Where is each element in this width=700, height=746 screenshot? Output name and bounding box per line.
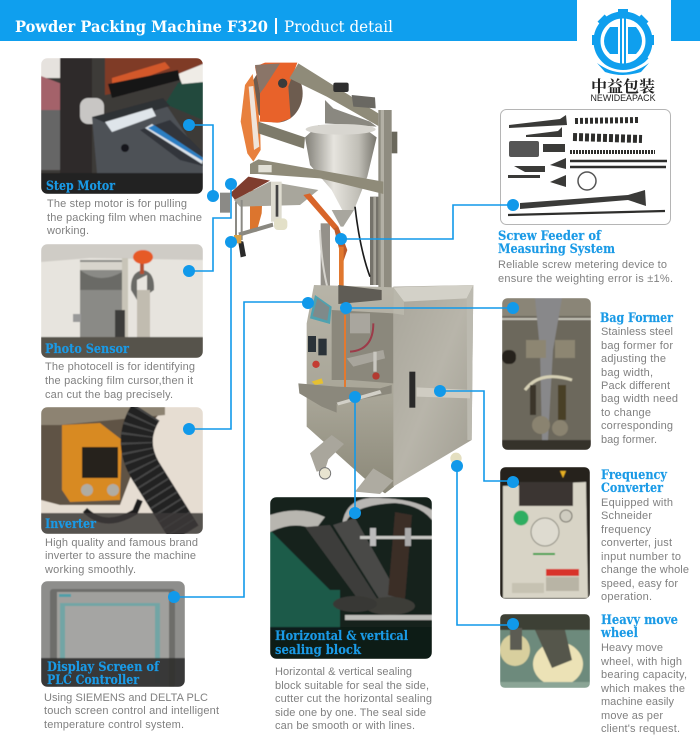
heading: display screen xyxy=(47,660,160,688)
text: bag former xyxy=(601,326,678,446)
connector: bag former xyxy=(340,302,519,314)
header bar xyxy=(0,0,700,41)
text: screw feeder xyxy=(498,259,673,285)
text: step motor: The step motor is for pulling xyxy=(47,198,187,210)
panel: display screen xyxy=(41,581,219,731)
heading: frequency converter: Converter xyxy=(601,481,663,496)
text: bag former: bag width, xyxy=(601,367,653,379)
text: step motor xyxy=(46,198,202,237)
side guides xyxy=(234,182,287,257)
text: photo sensor: the packing film cursor,then it xyxy=(45,375,193,387)
text: sealing block: cutter cut the horizontal sealing xyxy=(275,693,432,705)
panel: heavy move wheel xyxy=(500,613,687,735)
text: inverter: working smoothly. xyxy=(44,564,136,576)
text: heavy move wheel: machine easily xyxy=(601,696,674,708)
film roll xyxy=(241,63,303,232)
photo: PLC display xyxy=(41,581,185,687)
text: frequency converter: Schneider xyxy=(601,510,652,522)
machine frame xyxy=(258,63,397,307)
text: frequency converter: frequency xyxy=(601,524,652,536)
text: bag former: corresponding xyxy=(601,420,673,432)
connector: heavy move wheel xyxy=(451,460,519,630)
panel: bag former xyxy=(502,298,678,450)
photo: screw parts xyxy=(500,110,670,224)
connector: frequency converter xyxy=(434,385,519,488)
panel: frequency converter xyxy=(500,467,689,603)
photo: wheel xyxy=(500,614,590,688)
panel: inverter xyxy=(41,407,203,576)
text: bag former: bag former. xyxy=(601,434,657,446)
text: frequency converter: change the whole xyxy=(601,564,689,576)
heading: sealing block: sealing block xyxy=(275,643,362,658)
upper cross bar xyxy=(220,159,383,213)
photo: bag former xyxy=(502,298,591,450)
hopper xyxy=(305,83,377,227)
text: inverter: High quality and famous brand xyxy=(45,537,198,549)
text: display screen: Using SIEMENS and DELTA PLC xyxy=(44,692,208,704)
connector: photo sensor xyxy=(183,178,237,277)
text: step motor: working. xyxy=(46,225,89,237)
title: Product detail xyxy=(284,17,393,36)
text: frequency converter: input number to xyxy=(601,551,681,563)
heading: heavy move wheel: wheel xyxy=(600,626,638,641)
text: heavy move wheel: Heavy move xyxy=(601,642,663,654)
text: screw feeder: ensure the weighting error is ±1%. xyxy=(498,273,673,285)
text: frequency converter: converter, just xyxy=(601,537,672,549)
heading: heavy move wheel xyxy=(600,613,678,641)
text: step motor: the packing film when machine xyxy=(47,212,202,224)
text: frequency converter: operation. xyxy=(601,591,652,603)
photo: step motor xyxy=(41,58,203,194)
text: bag former: bag former for xyxy=(601,340,673,352)
connector: sealing block xyxy=(349,391,361,519)
text: frequency converter: speed, easy for xyxy=(601,578,678,590)
text: bag former: Stainless steel xyxy=(601,326,673,338)
text: sealing block: Horizontal & vertical sealing xyxy=(275,666,412,678)
heading: display screen: Display Screen of xyxy=(47,660,160,675)
connector: inverter xyxy=(183,236,237,435)
text: bag former: to change xyxy=(601,407,651,419)
text: heavy move wheel: wheel, with high xyxy=(600,656,682,668)
panel: step motor xyxy=(41,58,203,237)
heading: screw feeder: Measuring System xyxy=(498,242,615,257)
text: heavy move wheel: client's request. xyxy=(601,723,680,735)
panel: sealing block xyxy=(270,497,432,732)
text: display screen: touch screen control and intelligent xyxy=(44,705,219,717)
text: display screen: temperature control system. xyxy=(44,719,184,731)
panel: photo sensor xyxy=(41,244,203,401)
title: Powder Packing Machine F320 xyxy=(15,17,268,36)
text: inverter xyxy=(44,537,198,576)
heading: frequency converter: Frequency xyxy=(601,468,667,483)
heading: screw feeder: Screw Feeder of xyxy=(498,229,602,244)
text: bag former: Pack different xyxy=(601,380,670,392)
control panel xyxy=(308,285,382,385)
text: frequency converter: Equipped with xyxy=(601,497,673,509)
film strip xyxy=(303,193,370,390)
text: bag former: adjusting the xyxy=(601,353,666,365)
photo: sealing block xyxy=(270,497,432,659)
connector: step motor xyxy=(183,119,219,202)
heading: photo sensor: Photo Sensor xyxy=(45,342,129,357)
logo xyxy=(590,9,656,103)
text: display screen xyxy=(44,692,219,731)
text: photo sensor: can cut the bag precisely. xyxy=(45,389,173,401)
sealing mechanism xyxy=(298,310,393,413)
text: heavy move wheel xyxy=(600,642,687,735)
heading: sealing block: Horizontal & vertical xyxy=(275,629,408,644)
heading: bag former: Bag Former xyxy=(600,311,673,326)
machine base xyxy=(307,285,394,493)
text: heavy move wheel: which makes the xyxy=(600,683,685,695)
connector: screw feeder xyxy=(335,199,519,245)
text: bag former: bag width need xyxy=(601,393,678,405)
heading: step motor: Step Motor xyxy=(46,179,115,194)
logo: 中益包装 xyxy=(591,74,655,97)
heading: frequency converter xyxy=(601,468,667,496)
connector: display screen xyxy=(168,297,314,603)
photo: frequency converter xyxy=(500,467,590,599)
text: heavy move wheel: move as per xyxy=(601,710,663,722)
text: inverter: inverter to assure the machine xyxy=(45,550,196,562)
logo: NEWIDEAPACK xyxy=(590,93,656,103)
heading: inverter: Inverter xyxy=(45,517,96,532)
text: sealing block: side one by one. The seal side xyxy=(275,707,426,719)
text: heavy move wheel: bearing capacity, xyxy=(601,669,687,681)
heading: sealing block xyxy=(275,629,408,658)
machine photo xyxy=(220,63,473,494)
panel: screw feeder xyxy=(498,110,673,285)
text: frequency converter xyxy=(601,497,689,603)
text: sealing block: block suitable for seal the side, xyxy=(275,680,429,692)
heading: display screen: PLC Controller xyxy=(47,673,139,688)
cabinet door xyxy=(393,285,473,487)
heading: heavy move wheel: Heavy move xyxy=(601,613,678,628)
photo: photo sensor xyxy=(41,244,203,358)
text: photo sensor: The photocell is for identifying xyxy=(45,361,195,373)
wheels xyxy=(310,435,462,494)
text: screw feeder: Reliable screw metering device to xyxy=(498,259,667,271)
photo: inverter xyxy=(41,407,203,534)
text: sealing block xyxy=(275,666,432,732)
heading: screw feeder xyxy=(498,229,615,257)
text: sealing block: can be smooth or with lines. xyxy=(275,720,415,732)
text: photo sensor xyxy=(45,361,195,401)
